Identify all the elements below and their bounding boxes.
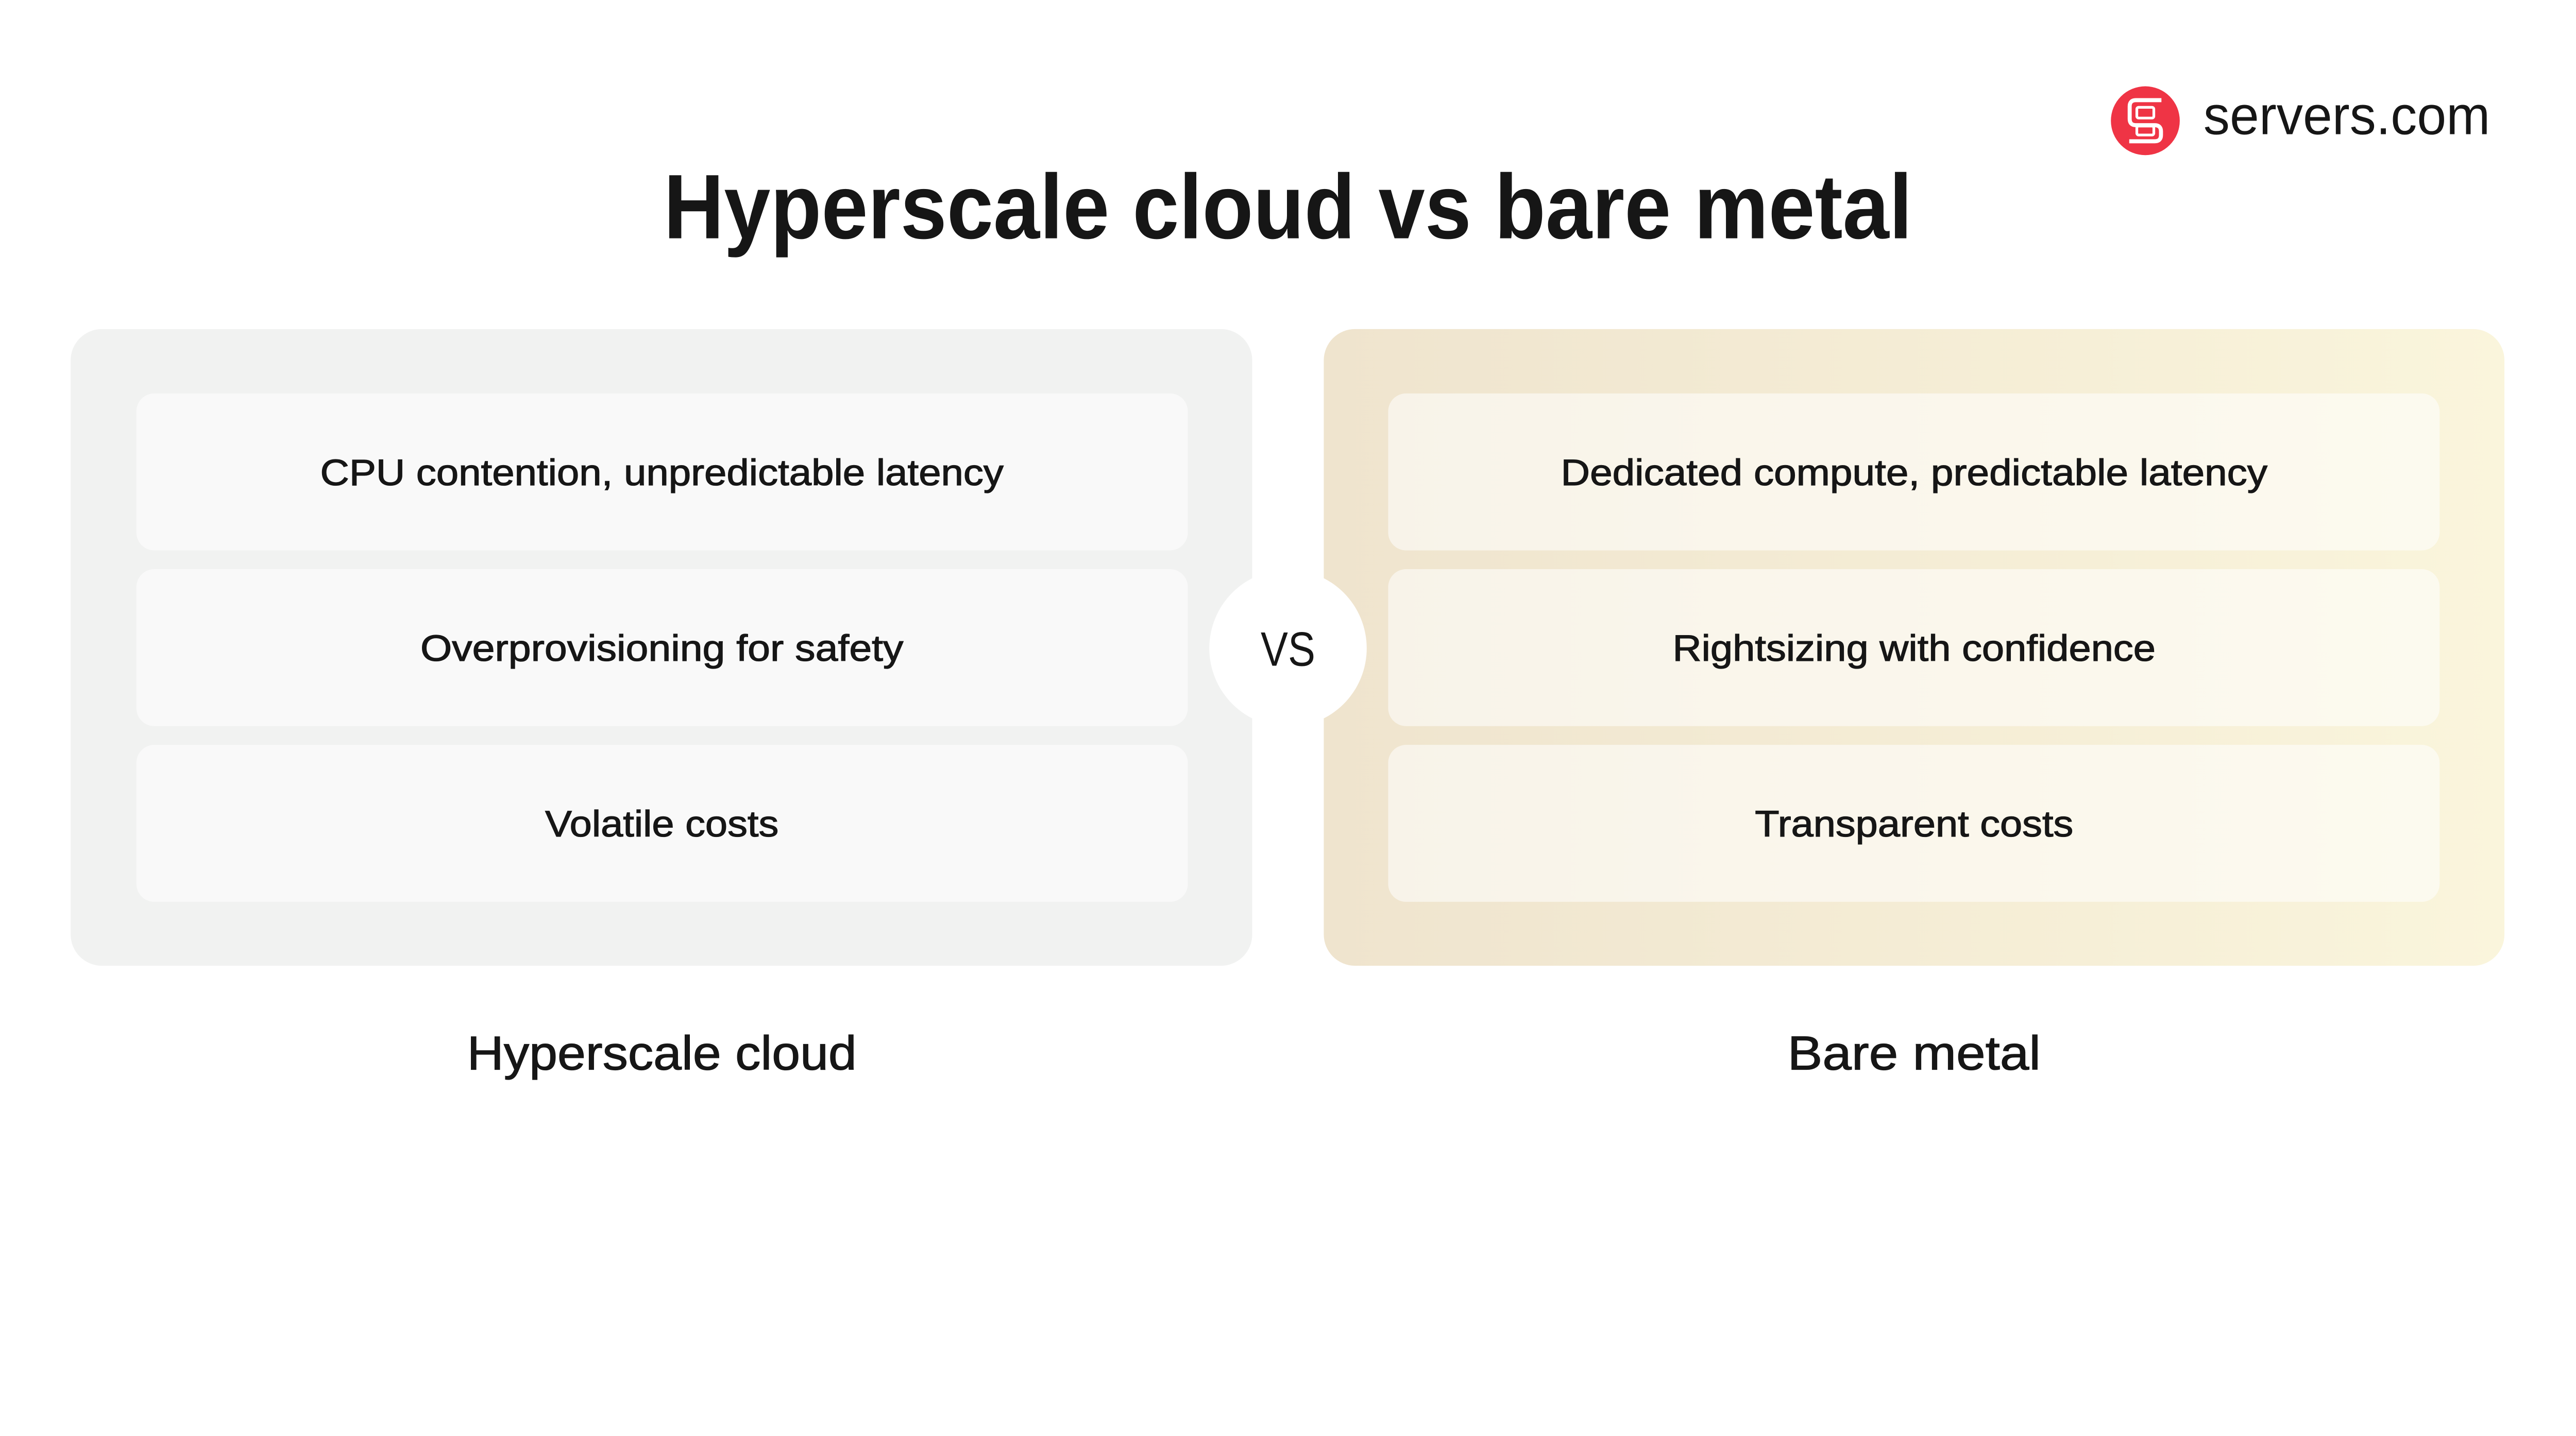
panel: bare metal bbox=[1324, 329, 2504, 966]
card: transparent costs bbox=[1388, 745, 2439, 902]
icon: logo circle bbox=[2111, 87, 2180, 155]
card: overprovisioning: Overprovisioning for safety bbox=[420, 628, 904, 669]
card: CPU contention bbox=[137, 394, 1188, 551]
card: volatile costs: Volatile costs bbox=[545, 804, 778, 845]
panel: hyperscale cloud bbox=[71, 329, 1252, 966]
card: dedicated compute: Dedicated compute, predictable latency bbox=[1561, 453, 2267, 493]
card: rightsizing: Rightsizing with confidence bbox=[1673, 628, 2156, 669]
card: transparent costs: Transparent costs bbox=[1755, 804, 2073, 845]
label: bare metal: Bare metal bbox=[1788, 1026, 2041, 1080]
vs badge bbox=[1209, 570, 1367, 727]
title: Hyperscale cloud vs bare metal bbox=[664, 156, 1912, 258]
card: CPU contention: CPU contention, unpredictable latency bbox=[320, 453, 1004, 493]
card: dedicated compute bbox=[1388, 394, 2439, 551]
card: overprovisioning bbox=[137, 569, 1188, 726]
card: volatile costs bbox=[137, 745, 1188, 902]
logo: servers.com bbox=[2111, 85, 2490, 155]
logo text: servers.com bbox=[2204, 85, 2490, 146]
vs badge: VS bbox=[1261, 622, 1315, 676]
card: rightsizing bbox=[1388, 569, 2439, 726]
label: hyperscale cloud: Hyperscale cloud bbox=[467, 1026, 857, 1080]
